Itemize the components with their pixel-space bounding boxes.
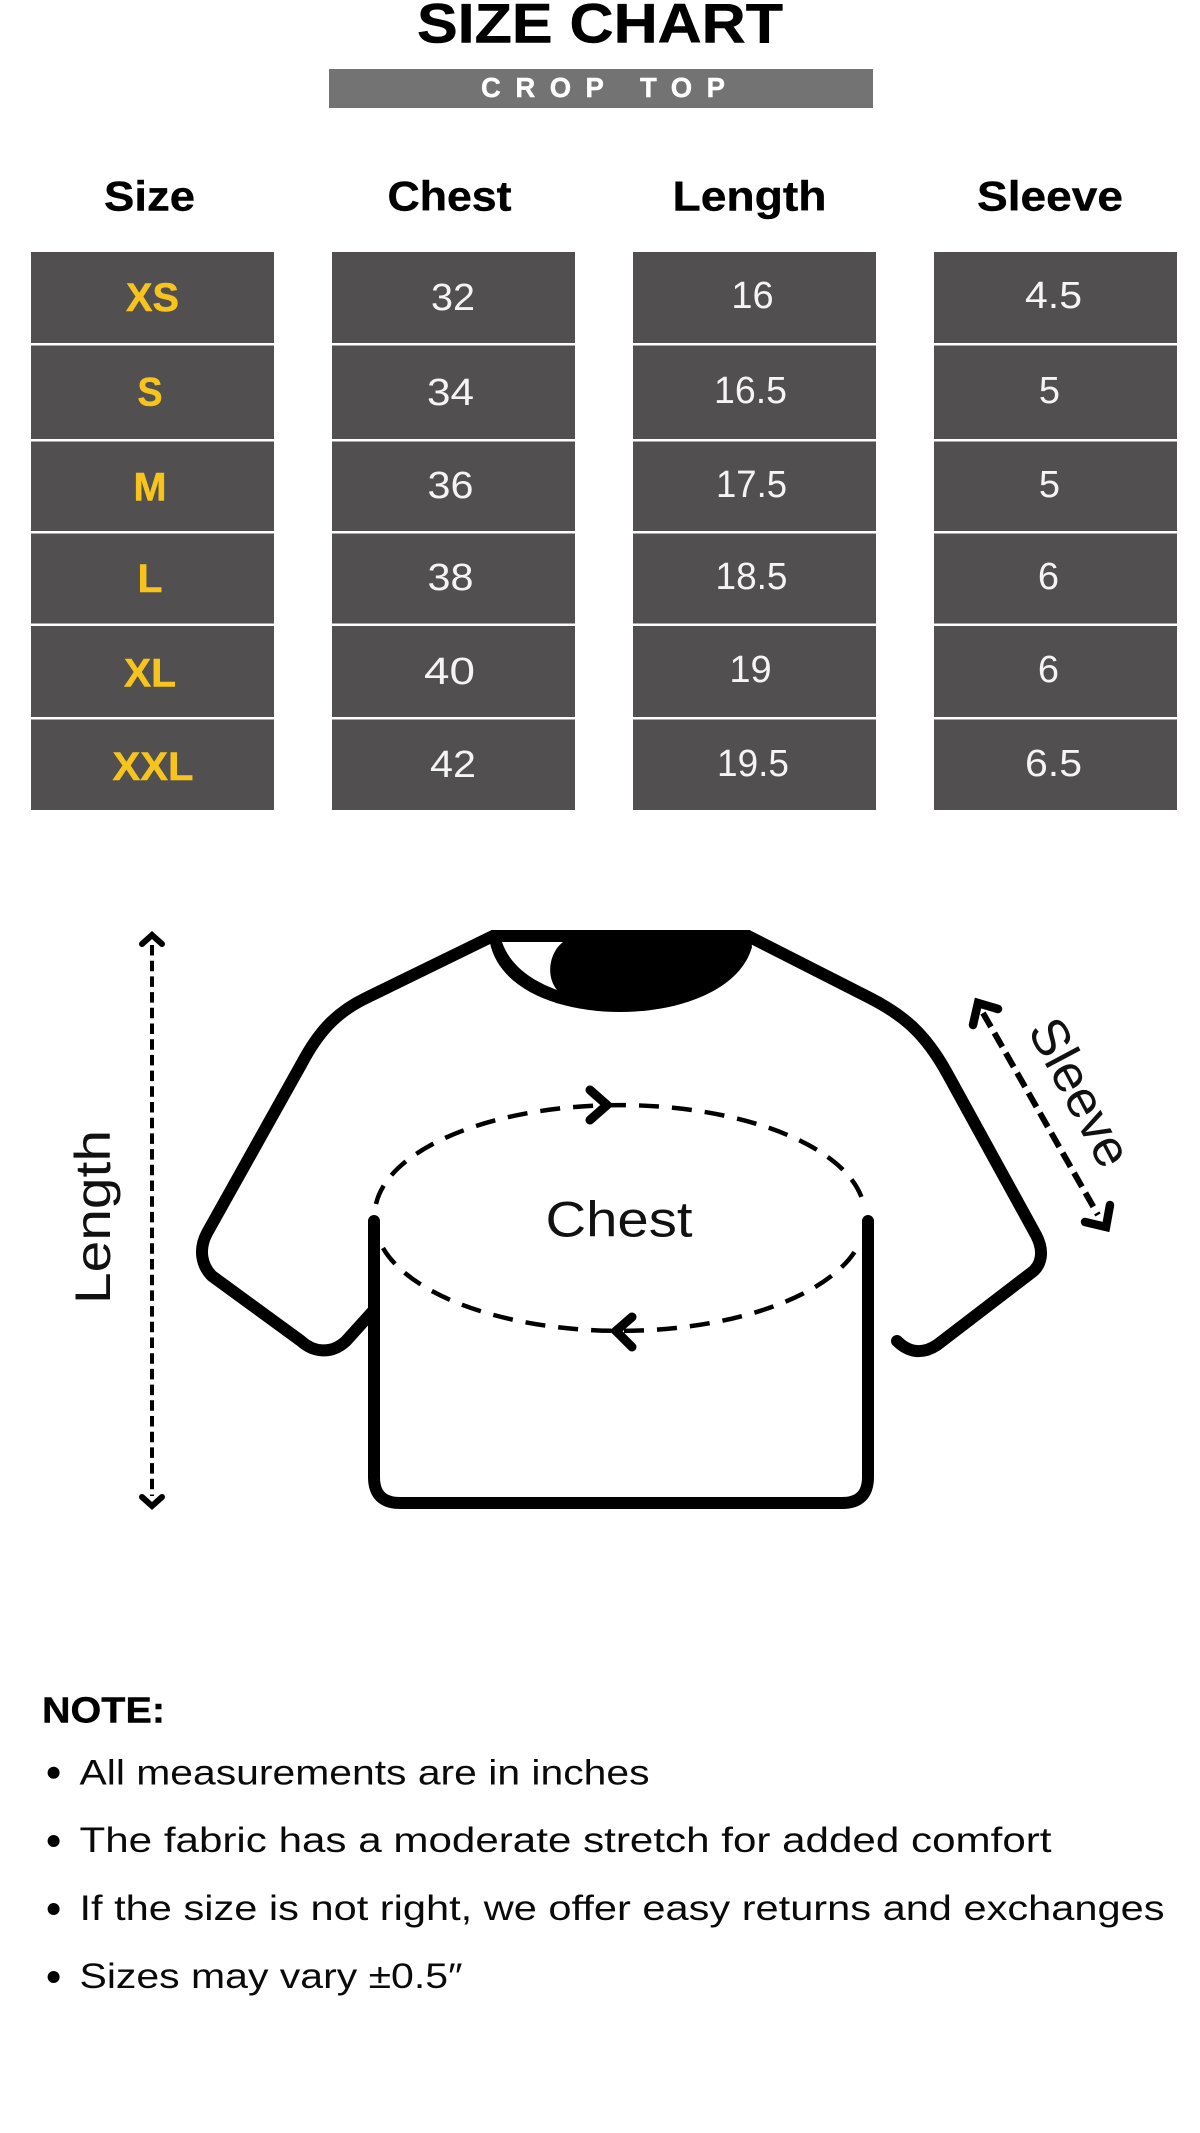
column: sizes bbox=[31, 252, 274, 810]
column: length values: 19.5 bbox=[717, 743, 789, 785]
chest measurement loop bbox=[376, 1090, 864, 1347]
column: sizes: XS bbox=[126, 276, 179, 320]
note 4: Sizes may vary ±0.5″ bbox=[80, 1957, 463, 1996]
column heading: Sleeve: Sleeve bbox=[977, 172, 1123, 220]
label: Length: Length bbox=[65, 1130, 121, 1304]
neckline bbox=[490, 930, 752, 1012]
column: sizes: XXL bbox=[112, 745, 194, 789]
column: chest values: 32 bbox=[431, 277, 475, 319]
column: length values bbox=[633, 252, 876, 810]
column: sleeve values: 5 bbox=[1039, 370, 1060, 412]
notes block bbox=[42, 1689, 1164, 1996]
column: sizes: S bbox=[138, 370, 162, 414]
column: length values: 16 bbox=[731, 275, 774, 317]
column: sleeve values: 4.5 bbox=[1025, 275, 1082, 317]
column heading: Length: Length bbox=[672, 172, 826, 220]
label: Chest: Chest bbox=[546, 1192, 693, 1248]
column: length values: 18.5 bbox=[716, 556, 788, 598]
subtitle banner: CROP TOP bbox=[481, 72, 725, 103]
arrow: length bbox=[142, 935, 162, 1506]
note 1: All measurements are in inches bbox=[80, 1753, 650, 1792]
column heading: Size: Size bbox=[104, 172, 195, 220]
column: chest values: 34 bbox=[427, 372, 474, 414]
column: sleeve values: 6.5 bbox=[1025, 743, 1082, 785]
column: chest values: 40 bbox=[424, 651, 475, 693]
column: sizes: L bbox=[138, 557, 162, 601]
column: chest values: 42 bbox=[430, 744, 476, 786]
note 3: If the size is not right, we offer easy returns and exchanges bbox=[80, 1889, 1164, 1928]
column: chest values: 38 bbox=[428, 557, 474, 599]
body hem outline bbox=[374, 1221, 868, 1503]
column: chest values: 36 bbox=[428, 465, 474, 507]
note 2: The fabric has a moderate stretch for added comfort bbox=[80, 1821, 1052, 1860]
left shoulder and sleeve outline bbox=[202, 936, 493, 1350]
column: chest values bbox=[332, 252, 575, 810]
right shoulder and sleeve outline bbox=[748, 936, 1041, 1351]
icon: chest bottom arrow bbox=[616, 1317, 632, 1347]
arrow: sleeve bbox=[973, 1003, 1110, 1227]
column heading: Chest: Chest bbox=[388, 172, 512, 220]
size table bbox=[31, 252, 1177, 810]
label: Sleeve: Sleeve bbox=[1016, 1008, 1143, 1177]
column: length values: 16.5 bbox=[714, 370, 787, 412]
column: sizes: XL bbox=[124, 651, 176, 695]
column: sleeve values bbox=[934, 252, 1177, 810]
subtitle banner bbox=[329, 69, 873, 108]
column: sleeve values: 5 bbox=[1039, 464, 1060, 506]
column: length values: 17.5 bbox=[716, 464, 787, 506]
column: sizes: M bbox=[134, 465, 166, 509]
note heading: NOTE: bbox=[42, 1689, 165, 1730]
diagram: crop top garment bbox=[202, 930, 1041, 1503]
icon: chest top arrow bbox=[590, 1090, 607, 1120]
column: sleeve values: 6 bbox=[1038, 649, 1059, 691]
column: sleeve values: 6 bbox=[1038, 556, 1059, 598]
column: length values: 19 bbox=[729, 649, 772, 691]
